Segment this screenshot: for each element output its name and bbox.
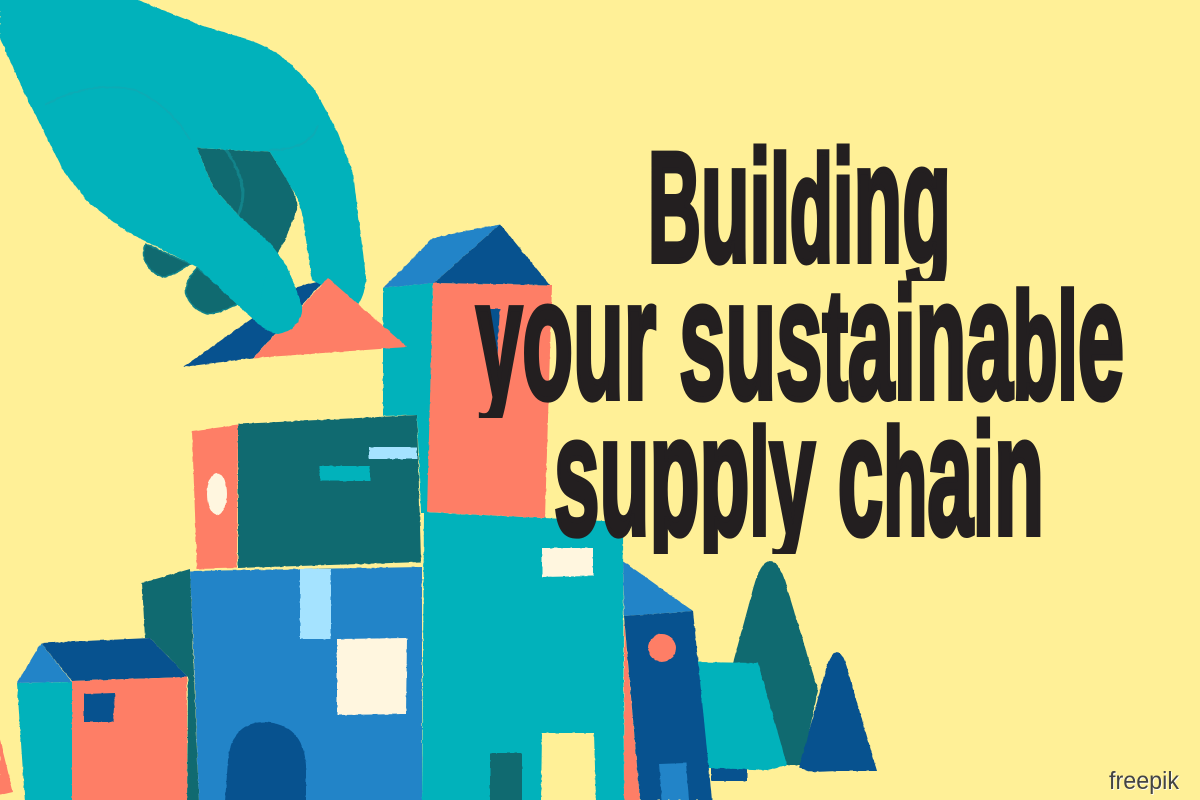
tall orange tower [383, 224, 552, 518]
small teal building [698, 662, 787, 781]
hand with roof piece [0, 0, 407, 367]
left small house [0, 638, 188, 800]
large blue building [190, 567, 422, 800]
illustration [0, 0, 877, 800]
dark teal box block [192, 415, 421, 569]
dark blue tower [623, 561, 712, 800]
central teal building [422, 512, 624, 800]
title line 2: your sustainable [476, 245, 1124, 435]
watermark: freepik: freepik [1109, 767, 1179, 795]
trees [733, 561, 877, 772]
dark teal side block [142, 569, 199, 800]
title line 3: supply chain [554, 381, 1044, 571]
title [474, 144, 1123, 554]
title line 1: Building [648, 108, 951, 298]
